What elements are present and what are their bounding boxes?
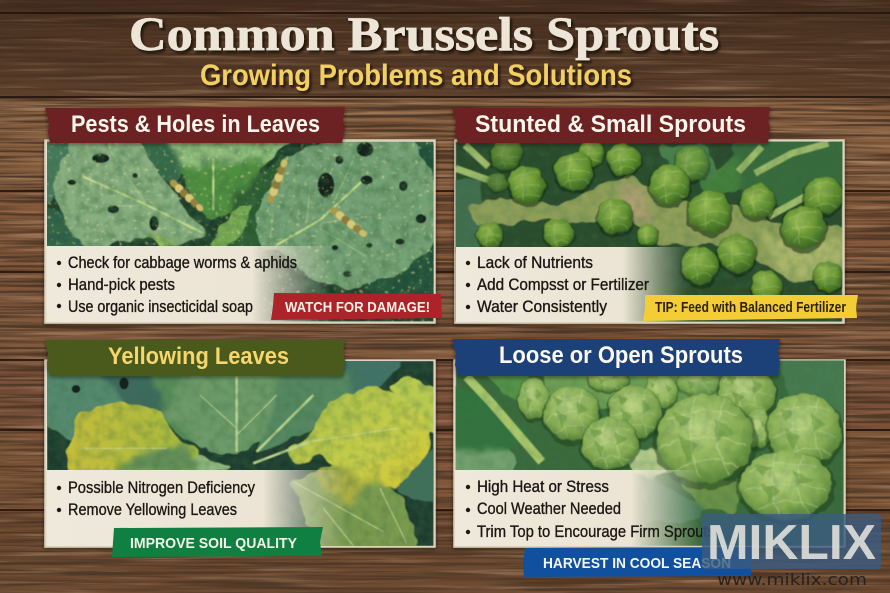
text panel bbox=[456, 247, 688, 322]
photo: caterpillars on holed leaves bbox=[40, 137, 440, 322]
heading banner: Yellowing Leaves bbox=[108, 343, 289, 370]
bullet list bbox=[466, 477, 715, 541]
tag: watch for damage bbox=[271, 293, 442, 320]
panel: stunted and small sprouts bbox=[448, 107, 858, 323]
tag: harvest in cool season: HARVEST IN COOL SEASON bbox=[543, 555, 731, 572]
card frame bbox=[45, 140, 435, 323]
heading banner: Pests & Holes in Leaves bbox=[71, 111, 320, 138]
watermark: miklix logo: www.miklix.com bbox=[717, 570, 867, 589]
bullet list: Add Compsst or Fertilizer bbox=[477, 275, 649, 294]
panel: loose or open sprouts bbox=[448, 339, 850, 577]
bullet list: Trim Top to Encourage Firm Sprouts bbox=[477, 522, 715, 541]
card frame bbox=[455, 140, 844, 323]
title: Common Brussels Sprouts bbox=[129, 8, 719, 61]
bullet list: Possible Nitrogen Deficiency bbox=[68, 478, 255, 497]
text panel bbox=[455, 470, 700, 546]
tag: improve soil quality: IMPROVE SOIL QUALITY bbox=[130, 535, 297, 552]
heading banner: Stunted & Small Sprouts bbox=[475, 111, 746, 138]
bullet list: Cool Weather Needed bbox=[477, 499, 621, 518]
bullet list bbox=[57, 478, 255, 519]
text panel bbox=[47, 246, 332, 322]
heading banner bbox=[45, 340, 345, 376]
heading banner: Loose or Open Sprouts bbox=[499, 342, 743, 369]
subtitle: Growing Problems and Solutions bbox=[200, 59, 632, 92]
tag: watch for damage: WATCH FOR DAMAGE! bbox=[285, 299, 430, 316]
bullet list: Hand-pick pests bbox=[68, 275, 175, 294]
heading banner bbox=[452, 107, 770, 143]
tag: feed tip: TIP: Feed with Balanced Fertilizer bbox=[655, 299, 846, 316]
bullet list: High Heat or Stress bbox=[477, 477, 609, 496]
watermark: miklix logo bbox=[702, 514, 881, 589]
photo: yellowing leaves bbox=[40, 358, 440, 550]
panel: pests and holes in leaves bbox=[40, 107, 442, 323]
bullet list: Use organic insecticidal soap bbox=[68, 297, 253, 316]
photo: loose open sprouts bbox=[448, 358, 850, 546]
panel: yellowing leaves bbox=[40, 340, 440, 557]
card frame bbox=[45, 360, 435, 547]
watermark: miklix logo: MIKLIX bbox=[707, 516, 876, 570]
bullet list bbox=[466, 253, 649, 316]
heading banner bbox=[45, 107, 345, 143]
bullet list: Lack of Nutrients bbox=[477, 253, 593, 272]
bullet list: Water Consistently bbox=[477, 297, 607, 316]
bullet list: Remove Yellowing Leaves bbox=[68, 500, 237, 519]
bullet list bbox=[57, 253, 297, 316]
photo: small sprouts on stalk bbox=[448, 139, 848, 322]
card frame bbox=[454, 360, 845, 547]
tag: improve soil quality bbox=[112, 527, 323, 557]
heading banner bbox=[452, 339, 780, 376]
tag: feed tip bbox=[643, 295, 858, 321]
tag: harvest in cool season bbox=[523, 547, 752, 577]
bullet list: Check for cabbage worms & aphids bbox=[68, 253, 297, 272]
text panel bbox=[47, 470, 347, 546]
